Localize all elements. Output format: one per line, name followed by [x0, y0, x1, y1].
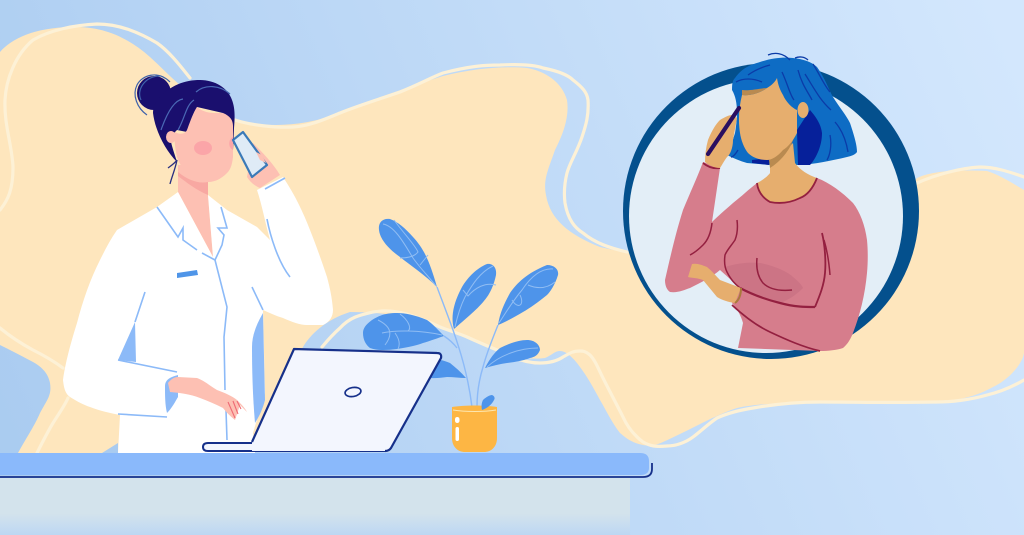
- leaf upper center: [453, 264, 496, 329]
- doctor hand on desk: [168, 377, 247, 420]
- coat shadow right: [252, 313, 265, 423]
- laptop base: [203, 443, 385, 451]
- loose hair: [168, 160, 177, 184]
- face: [739, 78, 797, 160]
- bun hair strands: [135, 75, 170, 115]
- plant: [363, 219, 558, 452]
- leaf top: [379, 219, 437, 287]
- pot rim highlight: [453, 410, 496, 412]
- raised hand: [705, 115, 737, 168]
- doctor: [63, 75, 333, 453]
- circle interior: [629, 79, 903, 353]
- ear: [166, 131, 176, 143]
- badge: [177, 270, 198, 278]
- hand holding phone: [247, 143, 280, 188]
- stems: [437, 287, 498, 407]
- hair: [153, 80, 235, 162]
- fingers over phone: [256, 152, 266, 163]
- laptop: [203, 349, 441, 451]
- coat lines: [118, 178, 290, 440]
- hair bun: [137, 76, 171, 110]
- leaf veins: [378, 220, 555, 367]
- screen outline: [252, 349, 441, 451]
- sweater: [665, 162, 868, 351]
- coat cuff: [165, 375, 178, 413]
- ear: [798, 102, 808, 118]
- logo: [344, 386, 362, 398]
- leaf left: [363, 313, 444, 350]
- cheek: [194, 141, 212, 155]
- sweater shadow: [725, 263, 803, 303]
- neck shadow: [178, 172, 208, 195]
- hair strands: [731, 53, 848, 160]
- hair: [727, 58, 857, 165]
- small blue sliver beside coat: [102, 443, 118, 453]
- neck: [757, 143, 817, 204]
- coat shadow left: [118, 322, 136, 362]
- hair strands: [161, 87, 230, 130]
- desk edge line: [0, 463, 652, 477]
- leaf right: [498, 265, 558, 325]
- leaf lower right: [485, 340, 540, 368]
- face: [175, 107, 233, 182]
- finger lines: [228, 401, 241, 418]
- ring: [623, 63, 919, 359]
- hair shadow on forehead: [742, 88, 767, 95]
- screen: [252, 349, 441, 451]
- phone: [708, 108, 739, 154]
- desk top: [0, 453, 649, 475]
- coat body: [63, 177, 333, 453]
- neck: [178, 165, 213, 257]
- wrist shadow: [735, 288, 741, 303]
- pot: [452, 406, 497, 452]
- phone: [233, 132, 267, 177]
- hair shade: [797, 110, 822, 165]
- sweater lines: [690, 163, 830, 351]
- cream speech blob: [0, 27, 1024, 453]
- pot shine: [455, 417, 460, 423]
- leaf lower left: [416, 359, 466, 378]
- desk: [0, 453, 652, 535]
- small leaf: [482, 395, 495, 410]
- hair shade under face: [752, 158, 770, 165]
- patient circle: [623, 53, 919, 359]
- neck shadow: [769, 135, 795, 168]
- far cheek: [229, 137, 233, 150]
- desk front: [0, 478, 630, 535]
- hand on arm: [688, 264, 741, 303]
